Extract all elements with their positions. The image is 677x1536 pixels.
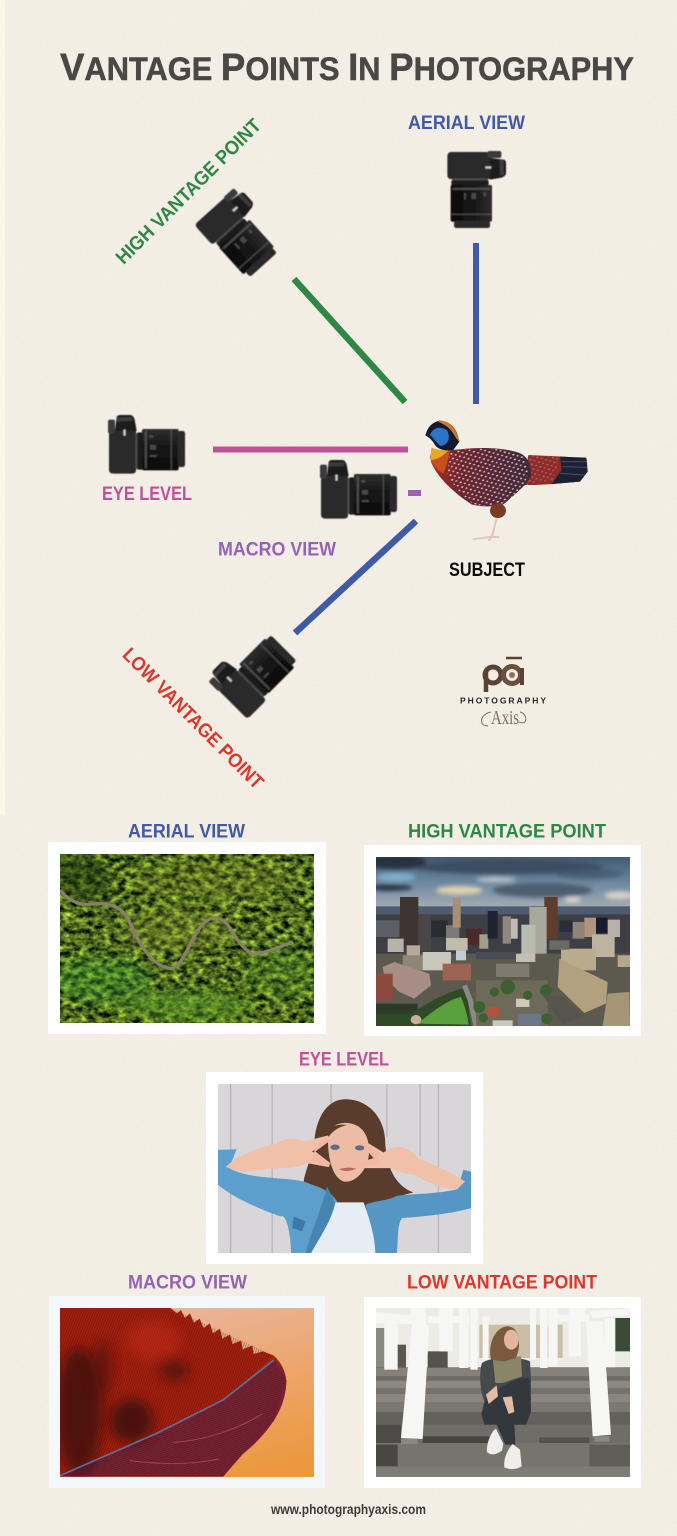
- mid-rise blocks: [376, 938, 630, 1026]
- photo: forest road: [60, 854, 314, 1023]
- icon: camera eye level: [108, 415, 185, 474]
- arms: [226, 1135, 331, 1172]
- shirt: [311, 1202, 375, 1253]
- photo frame: [48, 842, 326, 1034]
- bird tail: [523, 455, 588, 485]
- bird neck and head: [425, 421, 459, 450]
- icon: camera low vantage point: [205, 624, 301, 720]
- bird body: [431, 448, 531, 506]
- icon: camera high vantage point: [194, 185, 289, 281]
- connector line: eye level: [213, 446, 408, 452]
- panel: macro view: [49, 1272, 325, 1488]
- hair: [304, 1099, 413, 1216]
- panel: high vantage point: [364, 820, 641, 1036]
- label: macro view: MACRO VIEW: [218, 538, 337, 560]
- footer url: www.photographyaxis.com: [270, 1502, 426, 1517]
- panel: low vantage point: [364, 1272, 641, 1488]
- photo frame: [364, 1297, 641, 1488]
- stairs: [376, 1367, 630, 1477]
- feather vane: [60, 1308, 286, 1477]
- clouds: [366, 855, 634, 902]
- label: eye level: EYE LEVEL: [102, 483, 192, 505]
- logo mark: [485, 658, 522, 692]
- quill: [60, 1360, 274, 1476]
- photo: woman at eye level: [218, 1084, 471, 1253]
- eyes and mouth: [330, 1145, 340, 1150]
- park and trees: [376, 1004, 418, 1026]
- heading: EYE LEVEL: [299, 1048, 389, 1070]
- photo frame: [49, 1296, 325, 1488]
- porch railings and columns: [376, 1308, 630, 1439]
- heading: AERIAL VIEW: [128, 820, 246, 842]
- label: high vantage point: HIGH VANTAGE POINT: [112, 115, 266, 269]
- photo: city skyline: [376, 857, 630, 1026]
- connector line: high vantage point: [294, 279, 405, 402]
- heading: LOW VANTAGE POINT: [407, 1272, 597, 1294]
- road: [60, 890, 293, 968]
- heading: HIGH VANTAGE POINT: [408, 820, 606, 842]
- heading: MACRO VIEW: [128, 1272, 248, 1294]
- connector line: aerial view: [473, 243, 479, 404]
- fingers over face: [312, 1135, 331, 1167]
- panel: aerial view: [48, 820, 326, 1034]
- photo: woman on steps: [376, 1308, 630, 1477]
- logo wordmark: PHOTOGRAPHY: [460, 696, 546, 706]
- photo frame: [206, 1072, 483, 1264]
- icon: subject bird: [425, 421, 588, 541]
- icon: camera aerial view: [447, 151, 506, 228]
- towers: [376, 897, 620, 962]
- woman: [480, 1326, 531, 1469]
- label: subject: SUBJECT: [449, 559, 525, 581]
- neighbourhood: [476, 980, 548, 1026]
- logo: [460, 658, 546, 729]
- icon: camera macro view: [320, 460, 397, 519]
- connector line: low vantage point: [295, 521, 416, 633]
- label: low vantage point: LOW VANTAGE POINT: [118, 644, 268, 794]
- label: aerial view: AERIAL VIEW: [408, 112, 526, 134]
- logo script: Axis: [491, 707, 519, 729]
- title: VANTAGE POINTS IN PHOTOGRAPHY: [60, 47, 634, 89]
- photo frame: [364, 845, 641, 1036]
- jacket: [218, 1149, 340, 1253]
- connector line: macro view: [408, 490, 421, 496]
- photo: red feather: [60, 1308, 314, 1477]
- face: [328, 1123, 369, 1182]
- bird leg: [490, 503, 506, 518]
- dark blotches: [110, 1399, 153, 1442]
- panel: eye level: [206, 1048, 483, 1264]
